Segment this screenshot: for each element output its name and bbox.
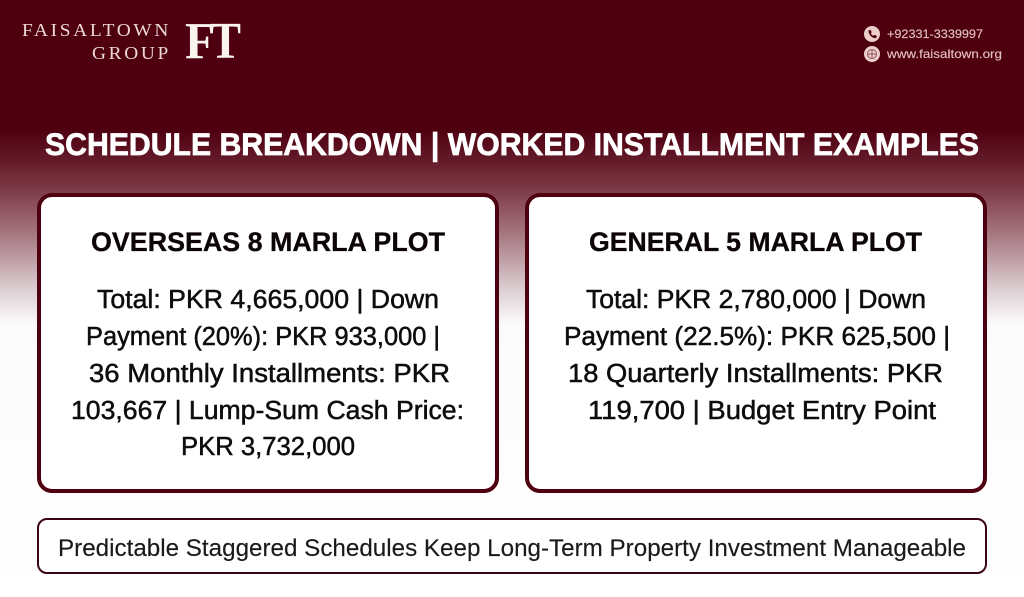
- banner frame: [38, 519, 986, 573]
- panel body text: Total: PKR 4,665,000 | Down: [97, 286, 439, 314]
- panel body text: Payment (22.5%): PKR 625,500 |: [564, 323, 950, 351]
- panel body text: 103,667 | Lump-Sum Cash Price:: [71, 397, 464, 425]
- banner text: Predictable Staggered Schedules Keep Long-Term Property Investment Manageable: [58, 535, 966, 562]
- callout: footer banner: [38, 519, 986, 573]
- panel body text: 18 Quarterly Installments: PKR: [568, 360, 943, 388]
- panel body text: [71, 286, 464, 461]
- icon: globe: [864, 46, 880, 62]
- panel frame: [527, 195, 985, 491]
- panel body text: Payment (20%): PKR 933,000 |: [86, 323, 440, 351]
- logo: Faisaltown Group: [22, 13, 241, 70]
- phone number: +92331-3339997: [887, 27, 983, 41]
- contact details: [864, 26, 1002, 62]
- logo wordmark: GROUP: [92, 43, 171, 63]
- logo wordmark: FAISALTOWN: [22, 20, 171, 40]
- panel heading: GENERAL 5 MARLA PLOT: [589, 227, 922, 257]
- panel: general 5 marla plot: [527, 195, 985, 491]
- panel: overseas 8 marla plot: [39, 195, 497, 491]
- icon: phone: [864, 26, 880, 42]
- panel body text: PKR 3,732,000: [181, 433, 355, 461]
- panel body text: Total: PKR 2,780,000 | Down: [586, 286, 926, 314]
- panel body text: [564, 286, 950, 425]
- logo monogram FT: F: [185, 13, 215, 70]
- logo monogram FT: [185, 13, 241, 70]
- logo wordmark: [22, 20, 171, 63]
- title: SCHEDULE BREAKDOWN | WORKED INSTALLMENT EXAMPLES: [45, 126, 979, 162]
- website: www.faisaltown.org: [886, 47, 1002, 61]
- panel body text: 36 Monthly Installments: PKR: [89, 360, 450, 388]
- panel frame: [39, 195, 497, 491]
- panel heading: OVERSEAS 8 MARLA PLOT: [91, 227, 445, 257]
- panel body text: 119,700 | Budget Entry Point: [588, 397, 936, 425]
- logo monogram FT: T: [210, 13, 241, 70]
